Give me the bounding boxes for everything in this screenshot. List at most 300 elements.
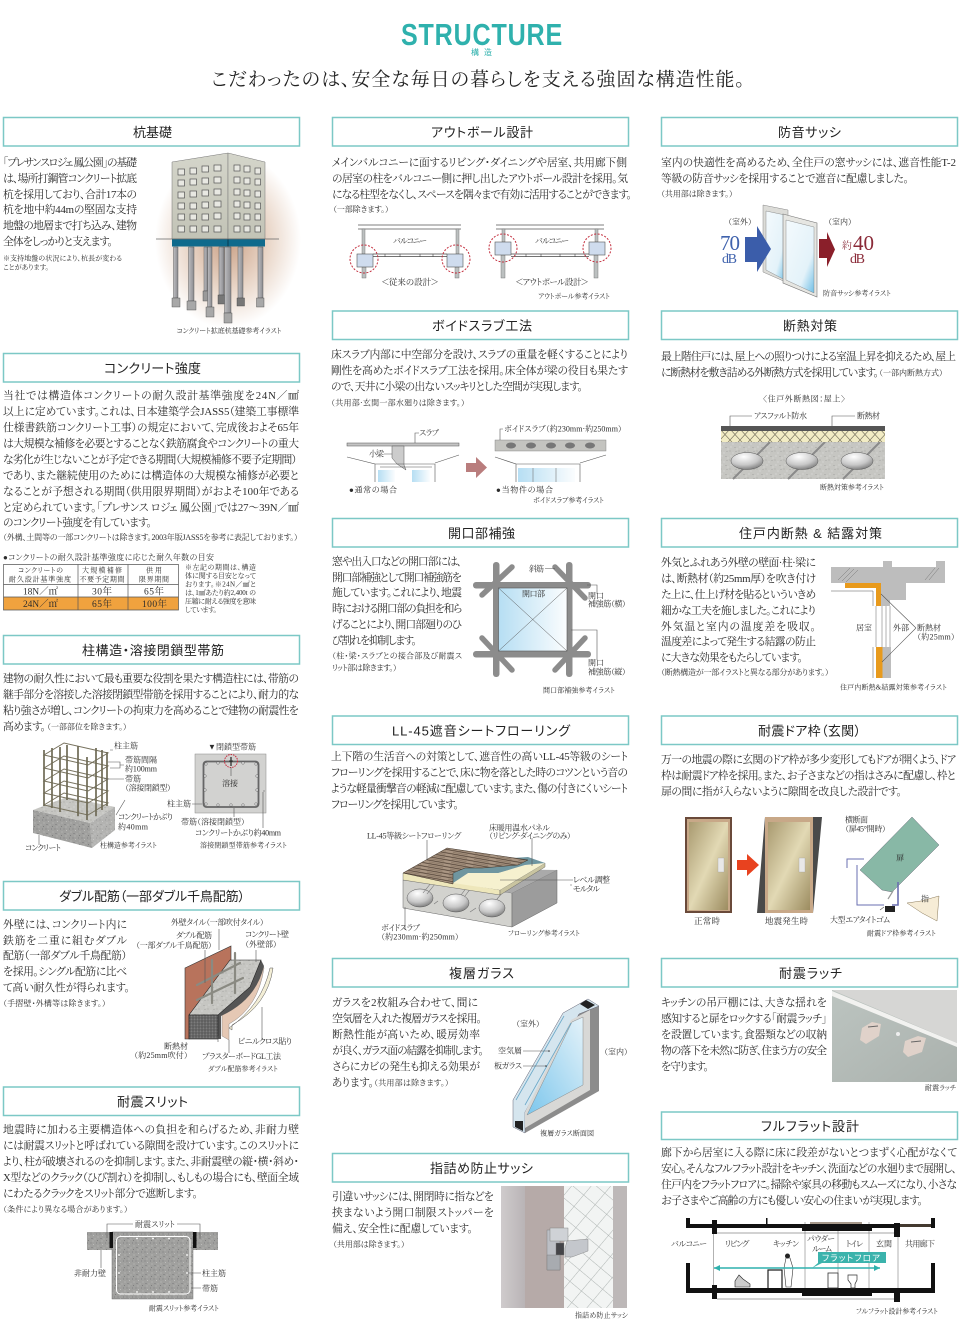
caption: 指詰め防止サッシ <box>575 1310 629 1320</box>
text block: に断熱材を敷き詰める外断熱方式を採用しています。 <box>661 365 879 379</box>
illustration: insulation section: 断熱材 <box>917 622 941 632</box>
illustration: flooring layers: LL-45等級シートフローリング <box>367 830 461 840</box>
illustration: roof insulation: 〈住戸外断熱図：屋上〉 <box>763 394 845 404</box>
illustration: seismic slit: 非耐力壁 <box>74 1268 106 1278</box>
heading <box>4 354 300 382</box>
table note: しています。 <box>185 606 217 614</box>
text block: メインバルコニーに面するリビング・ダイニングや居室、共用廊下側 <box>331 155 627 169</box>
text block: ※支持地盤の状況により、杭長が変わる <box>3 254 122 262</box>
panel: 住戸内断熱 & 結露対策 <box>661 518 958 692</box>
text block: 配筋（一部ダブル千鳥配筋） <box>3 948 127 962</box>
text block: 空気層を入れた複層ガラスを採用。 <box>332 1011 482 1025</box>
illustration: section <box>671 1218 935 1302</box>
text block <box>332 995 484 1089</box>
text block: 地盤の地層まで打ち込み、建物 <box>3 218 137 232</box>
text block: 安心。そんなフルフラット設計をキッチン、洗面などの水廻りまで展開し、 <box>661 1161 957 1175</box>
caption: 耐震スリット参考イラスト <box>149 1304 219 1312</box>
text block: （共用部·玄関一部水廻りは除きます。） <box>331 398 465 408</box>
text block: 室内の快適性を高めるため、全住戸の窓サッシには、遮音性能T-2 <box>661 155 956 169</box>
column labels: 柱主筋 <box>114 740 138 750</box>
text block: 仕様書鉄筋コンクリート工事）の規定において、完成後およそ65年 <box>3 420 299 434</box>
column labels: 帯筋間隔 <box>125 754 157 764</box>
illustration: flooring layers: 床暖用温水パネル <box>489 822 550 832</box>
caption: 開口部補強参考イラスト <box>543 686 615 694</box>
durability table: コンクリートの <box>18 566 63 574</box>
text block: 開口部補強として開口補強筋を <box>332 570 462 584</box>
caption: 柱構造参考イラスト <box>100 840 157 850</box>
panel: LL-45遮音シートフローリング <box>331 716 628 942</box>
diagram: void slab <box>495 424 622 494</box>
illustration: roof insulation: 断熱材 <box>857 410 880 420</box>
text block: を守ります。 <box>661 1060 709 1073</box>
wall labels: コンクリート壁 <box>245 929 289 939</box>
text block <box>331 155 632 214</box>
text block: な劣化が生じないことが予定できる期間（大規模補修不要予定期間） <box>3 452 297 466</box>
wall labels: ダブル配筋 <box>176 930 212 940</box>
durability table: 限界期間 <box>139 574 169 584</box>
text block: より、柱が破壊されるのを抑制します。また、非耐震壁の縦・横・斜め・ <box>3 1154 299 1168</box>
text block: ガラスを2枚組み合わせて、間に <box>332 995 478 1009</box>
column labels <box>25 740 173 852</box>
text block: 万一の地震の際に玄関のドア枠が多少変形してもドアが開くよう、ドア <box>661 752 956 766</box>
illustration: insulation section: 外部 <box>893 622 909 632</box>
durability table: 30年 <box>92 586 112 598</box>
heading <box>662 716 958 744</box>
flat floor arrow and flag <box>714 1252 886 1271</box>
illustration: welded hoop: 溶接 <box>222 778 238 788</box>
illustration: flooring layers <box>367 822 610 942</box>
diagram: out-pole design: ＜アウトポール設計＞ <box>516 277 588 287</box>
illustration: soundproof sash: （室外） <box>728 216 752 226</box>
text block: であり、また継続使用のためには構造体の大規模な補修が必要と <box>3 468 299 482</box>
room labels: トイレ <box>846 1240 864 1248</box>
column labels: 帯筋 <box>125 774 141 784</box>
text block: 「プレサンスロジェ 鳳公園」の基礎 <box>3 155 137 169</box>
illustration: building and piles <box>155 152 301 328</box>
column labels: （溶接閉鎖型） <box>125 782 171 792</box>
text block: （一部部位を除きます。） <box>47 722 127 732</box>
title <box>211 17 745 90</box>
illustration: door frame section <box>830 814 939 924</box>
wall labels: 断熱材 <box>164 1041 188 1051</box>
durability table <box>4 564 178 610</box>
illustration: double glazing: （室外） <box>516 1018 540 1028</box>
text block: 杭を地中約44mの堅固な支持 <box>3 202 137 216</box>
table caption: ●コンクリートの耐久設計基準強度に応じた耐久年数の目安 <box>3 552 214 562</box>
text block: （断熱構造が一部イラストと異なる部分があります。） <box>661 667 829 677</box>
illustration: soundproof sash: dB <box>722 252 737 267</box>
illustration: flooring layers: ボイドスラブ <box>381 924 420 932</box>
heading: 断熱対策 <box>783 319 837 334</box>
column labels: 約40mm <box>118 822 149 832</box>
illustration: welded hoop <box>167 742 287 850</box>
wall labels <box>134 917 292 1061</box>
illustration: double rebar wall <box>134 917 292 1073</box>
text block <box>3 1122 299 1214</box>
panel: ボイドスラブ工法 <box>331 311 629 504</box>
text block: 温度差によって発生する結露の防止 <box>661 634 816 648</box>
illustration: double glazing: 板ガラス <box>494 1060 522 1070</box>
table note: 体に関する目安となって <box>185 571 257 580</box>
durability table: 65年 <box>144 586 164 598</box>
room labels: キッチン <box>773 1240 800 1248</box>
text block: にわたるクラックをスリット部分で遮断します。 <box>3 1186 198 1200</box>
illustration: insulation section <box>831 561 955 678</box>
column labels: コンクリートかぶり <box>118 812 173 822</box>
illustration: double glazing: 空気層 <box>498 1046 522 1056</box>
text block <box>332 554 462 672</box>
text block: キッチンの吊戸棚には、大きな揺れを <box>661 995 827 1009</box>
text block <box>661 995 827 1073</box>
text block: になる柱型をなくし、スペースを隅々まで有効に活用することができます。 <box>332 187 632 201</box>
fixtures <box>735 1254 857 1288</box>
diagram: opening reinforcement: 斜筋 <box>529 564 544 574</box>
panel: 耐震スリット <box>3 1087 300 1312</box>
illustration: soundproof sash: 40 <box>853 231 874 255</box>
heading <box>332 311 628 340</box>
text block: 当社では構造体コンクリートの耐久設計基準強度を24N／㎟ <box>3 388 299 402</box>
heading: ダブル配筋（一部ダブル千鳥配筋） <box>59 889 245 904</box>
illustration: seismic slit: 柱主筋 <box>202 1268 226 1278</box>
caption: 溶接閉鎖型帯筋参考イラスト <box>200 840 287 850</box>
text block: 外気温と室内の温度差を吸収。 <box>661 619 816 633</box>
text block: （柱・梁・スラブとの接合部及び耐震ス <box>332 650 462 660</box>
text block <box>3 155 137 272</box>
illustration: soundproof sash: 70 <box>720 231 740 255</box>
durability table: 耐久設計基準強度 <box>9 574 71 584</box>
diagram: opening reinforcement <box>473 562 626 677</box>
heading <box>662 118 958 146</box>
diagram: conventional slab: 小梁 <box>369 448 385 458</box>
text block: のコンクリート強度を有しています。 <box>3 515 152 529</box>
diagram: out-pole design: バルコニー <box>535 236 569 246</box>
illustration: seismic slit: 耐震スリット <box>135 1219 175 1229</box>
text block <box>661 1145 957 1207</box>
illustration: door frame section: （扉45°開時） <box>845 824 886 834</box>
caption: 耐震ラッチ <box>925 1083 957 1092</box>
durability table: 65年 <box>92 598 112 610</box>
text block <box>661 752 956 798</box>
table note: 圧縮に耐える強度を意味 <box>185 596 256 606</box>
caption: 複層ガラス断面図 <box>540 1128 594 1138</box>
text block: 床スラブ内部に中空部分を設け、スラブの重量を軽くすることにより <box>331 347 628 361</box>
text block: （共用部は除きます。） <box>661 188 733 198</box>
room labels: リビング <box>725 1240 749 1248</box>
diagram: conventional design: バルコニー <box>393 236 427 246</box>
diagram: conventional slab: スラブ <box>419 428 439 438</box>
text block <box>3 671 299 733</box>
text block: 全体をしっかりと支えます。 <box>3 234 113 248</box>
text block: 鉄筋を二重に組むダブル <box>3 933 127 947</box>
text block: び割れを抑制します。 <box>332 633 417 647</box>
column labels: 約100mm <box>125 764 158 774</box>
heading <box>4 1087 300 1116</box>
text block: （共用部は除きます。） <box>333 1239 405 1249</box>
column labels: コンクリート <box>25 844 61 852</box>
table note: おります。※24N／㎟と <box>185 580 256 588</box>
text block: 高めます。 <box>3 719 46 733</box>
text block: ような軽量衝撃音の軽減に配慮しています。また、傷の付きにくいシート <box>331 781 628 795</box>
text block: 外壁には、コンクリート内に <box>3 917 127 931</box>
text block: フローリングを採用することで、床に物を落とした時のコツンという音の <box>331 765 628 779</box>
wall labels: （約25mm吹付） <box>134 1050 188 1060</box>
text block: 廊下から居室に入る際に床に段差がないとつまずく心配がなくて <box>661 1145 957 1159</box>
heading: 防音サッシ <box>778 125 841 140</box>
caption: 耐震ドア枠参考イラスト <box>867 928 936 938</box>
text block: ことがあります。 <box>3 264 49 272</box>
wall labels: 外壁タイル（一部吹付タイル） <box>171 917 264 927</box>
diagram: out-pole design <box>489 225 611 287</box>
table note: は、1㎟あたり約2,400t の <box>185 588 256 597</box>
text block <box>332 1189 494 1249</box>
text block: は、場所打鋼管コンクリート拡底 <box>3 171 137 185</box>
text block: 扉の間に指が入らないように隙間を改良した設計です。 <box>661 784 902 798</box>
text block: に大きな効果をもたらしています。 <box>661 650 803 664</box>
text block: （一部除きます。） <box>333 204 389 214</box>
room labels: 共用廊下 <box>905 1238 935 1248</box>
text block: 時における開口部の負担を和ら <box>332 601 462 615</box>
flat floor arrow and flag: フラットフロア <box>822 1253 880 1263</box>
text block: 杭を採用しており、合計17本の <box>3 187 137 201</box>
caption: ダブル配筋参考イラスト <box>208 1064 278 1073</box>
diagram: conventional slab: ●通常の場合 <box>349 484 397 494</box>
illustration: door frame section: 大型エアタイトゴム <box>830 914 890 924</box>
caption: コンクリート拡底杭基礎参考イラスト <box>176 326 282 335</box>
diagram: void slab: ボイドスラブ（約230mm·約250mm） <box>504 424 622 434</box>
durability table: 18N／㎡ <box>23 586 58 598</box>
illustration: double glazing <box>494 999 628 1133</box>
text block: （外構、土間等の一部コンクリートは除きます。2003年版JASS5を参考に表記しております。） <box>3 532 298 542</box>
text block: 物の落下を未然に防ぎ、住まう方の安全 <box>661 1043 827 1057</box>
illustration: soundproof sash: 約 <box>842 239 852 252</box>
arrow <box>466 457 487 478</box>
text block <box>3 917 130 1008</box>
illustration: roof insulation: アスファルト防水 <box>754 410 807 420</box>
panel: 指詰め防止サッシ <box>332 1154 629 1320</box>
panel: 開口部補強 <box>332 518 628 694</box>
text block: 感知すると扉をロックする「耐震ラッチ」 <box>661 1011 827 1025</box>
text block: た上に、仕上げ材を貼るといういきめ <box>661 587 816 601</box>
room labels: 玄関 <box>876 1238 892 1248</box>
text block: が良く、ガラス面の結露を抑制します。 <box>332 1043 484 1057</box>
table note <box>185 562 257 614</box>
room labels: ルーム <box>812 1244 832 1254</box>
diagram: opening reinforcement: 開口 <box>588 658 604 668</box>
wall labels: ビニルクロス貼り <box>238 1036 292 1046</box>
illustration: seismic slit: 帯筋 <box>202 1283 218 1293</box>
text block: リット部は除きます。） <box>332 662 397 672</box>
heading: 杭基礎 <box>133 125 172 140</box>
illustration: roof insulation <box>721 394 885 479</box>
panel: 柱構造・溶接閉鎖型帯筋 <box>3 636 300 852</box>
text block: フローリングを採用しています。 <box>331 797 459 811</box>
text block: 住戸内をフラットフロアに。掃除や家具の移動もスムーズになり、小さな <box>661 1177 957 1191</box>
illustration: door during earthquake <box>757 817 822 926</box>
illustration: flooring layers: モルタル <box>573 884 600 894</box>
caption: アウトポール参考イラスト <box>538 292 610 300</box>
text block: お子さまやご高齢の方にも優しい安心の住まいが実現します。 <box>661 1193 923 1207</box>
text block: 窓や出入口などの開口部には、 <box>332 554 462 568</box>
photo: stopper <box>501 1186 627 1308</box>
durability table: 大規模補修 <box>82 566 122 574</box>
caption: 住戸内断熱&結露対策参考イラスト <box>840 682 947 692</box>
heading: 耐震ラッチ <box>779 966 842 981</box>
illustration: flooring layers: （リビング·ダイニングのみ） <box>489 832 571 840</box>
text block: を採用。シングル配筋に比べ <box>3 964 127 978</box>
wall labels: プラスターボードGL工法 <box>202 1051 282 1061</box>
heading: コンクリート強度 <box>104 361 201 376</box>
diagram: opening reinforcement: 開口部 <box>522 588 545 598</box>
illustration: welded hoop: 柱主筋 <box>167 798 191 808</box>
diagram: opening reinforcement: 補強筋（横） <box>588 598 626 608</box>
heading <box>662 958 958 987</box>
photo: latch <box>832 990 957 1082</box>
text block: 以上に定めています。これは、日本建築学会JASS5（建築工事標準 <box>3 404 299 418</box>
text block: 剛性を高めたボイドスラブ工法を採用。床全体が梁の役目も果たす <box>331 363 629 377</box>
heading: ボイドスラブ工法 <box>432 319 532 334</box>
text block <box>331 347 629 408</box>
text block: 上下階の生活音への対策として、遮音性の高いLL-45等級のシート <box>331 749 628 763</box>
durability table: 24N／㎡ <box>23 599 58 610</box>
text block: 備え、安全性に配慮しています。 <box>332 1221 473 1235</box>
text block: は、断熱材（約25mm厚）を吹き付け <box>661 571 816 585</box>
room labels <box>671 1234 935 1254</box>
text block: 断熱性能が高いため、暖房効率 <box>332 1027 480 1041</box>
heading <box>332 518 628 547</box>
durability table: 100年 <box>142 598 167 610</box>
text block: て高い耐久性が得られます。 <box>3 980 130 994</box>
diagram: conventional slab <box>347 428 459 494</box>
caption: フルフラット設計参考イラスト <box>856 1306 938 1316</box>
diagram: void slab: ●当物件の場合 <box>496 484 553 494</box>
text block <box>661 555 829 677</box>
heading: 住戸内断熱 & 結露対策 <box>739 526 882 541</box>
illustration: welded hoop: 帯筋（溶接閉鎖型） <box>181 816 245 826</box>
text block <box>331 749 628 811</box>
illustration: column rebar <box>25 740 173 852</box>
text block: X型などのクラック（ひび割れ）を抑制し、もしもの場合にも、壁面全域 <box>3 1170 299 1184</box>
text block: 建物の耐久性において最も重要な役割を果たす構造柱には、帯筋の <box>3 671 299 685</box>
illustration: door during earthquake: 地震発生時 <box>765 916 808 926</box>
heading <box>4 118 300 146</box>
heading <box>4 882 300 910</box>
illustration: door frame section: 横断面 <box>845 814 868 824</box>
panel: コンクリート強度 <box>3 354 299 614</box>
caption: 断熱対策参考イラスト <box>820 482 884 492</box>
table note: ※左記の期間は、構造 <box>185 562 256 572</box>
heading: LL-45遮音シートフローリング <box>392 724 571 739</box>
tagline: こだわったのは、安全な毎日の暮らしを支える強固な構造性能。 <box>211 68 745 90</box>
text block <box>661 155 956 198</box>
caption: ボイドスラブ参考イラスト <box>533 496 604 504</box>
text block: 外気とふれあう外壁の壁面·柱·梁に <box>661 555 816 569</box>
illustration: seismic slit <box>74 1219 226 1299</box>
text block: （共用部は除きます。） <box>374 1078 449 1088</box>
text block: 枠は耐震ドア枠を採用。また、お子さまなどの指はさみに配慮し、枠と <box>661 768 956 782</box>
text block: 等級の防音サッシを採用することで遮音に配慮しました。 <box>661 171 909 185</box>
illustration: door frame section: 扉 <box>896 854 904 862</box>
caption: 防音サッシ参考イラスト <box>823 288 891 298</box>
illustration: double glazing: （室内） <box>604 1046 628 1056</box>
illustration: soundproof sash: dB <box>850 252 865 267</box>
panel: 耐震ラッチ <box>661 958 958 1092</box>
text block: 地震時に加わる主要構造体への負担を和らげるため、非耐力壁 <box>3 1122 299 1136</box>
heading: 指詰め防止サッシ <box>430 1161 533 1176</box>
heading: アウトボール設計 <box>431 125 533 140</box>
heading <box>662 1112 958 1140</box>
text block <box>661 349 956 379</box>
illustration: door frame section: 指 <box>921 894 929 904</box>
panel: フルフラット設計 <box>661 1112 958 1316</box>
title: 構造: 構造 <box>471 47 492 57</box>
text block: （条件により異なる場合があります。） <box>3 1204 128 1214</box>
text block: 施しています。これにより、地震 <box>332 585 462 599</box>
text block: 最上階住戸には、屋上への照りつけによる室温上昇を抑えるため、屋上 <box>661 349 956 363</box>
text block: あります。 <box>332 1076 374 1089</box>
text block: 粘り強さが増し、コンクリートの拘束力を高めることで建物の耐震性を <box>3 703 299 717</box>
illustration: normal door <box>685 817 732 926</box>
text block: 細かな工夫を施しました。これにより <box>661 603 816 617</box>
heading <box>332 958 628 987</box>
heading <box>4 636 300 664</box>
heading <box>662 311 958 340</box>
text block: 引違いサッシには、開閉時に指などを <box>332 1189 494 1203</box>
heading: 開口部補強 <box>448 526 515 541</box>
panel: ダブル配筋 <box>3 882 300 1073</box>
heading: 耐震スリット <box>117 1095 188 1110</box>
text block: ので、天井に小梁の出ないスッキリとした空間が実現します。 <box>331 379 583 393</box>
text block <box>3 388 299 542</box>
panel: 断熱対策 <box>661 311 958 492</box>
title: STRUCTURE: STRUCTURE <box>401 17 563 52</box>
heading: 柱構造・溶接閉鎖型帯筋 <box>82 643 224 658</box>
illustration: welded hoop: ▼閉鎖型帯筋 <box>208 742 256 752</box>
wall labels: （外壁部） <box>245 939 277 949</box>
panel: 耐震ドア枠 <box>661 716 958 938</box>
panel: 複層ガラス <box>332 958 628 1138</box>
illustration: insulation section: （約25mm） <box>917 632 955 642</box>
illustration: welded hoop: コンクリートかぶり約40mm <box>195 828 282 838</box>
text block: なることが予想される期間（供用限界期間）がおよそ100年である <box>3 484 299 498</box>
text block: （一部内断熱方式） <box>879 368 943 378</box>
heading: 耐震ドア枠（玄関） <box>758 724 861 739</box>
heading <box>662 518 958 547</box>
illustration: insulation section: 居室 <box>856 622 872 632</box>
illustration: flooring layers: レベル調整 <box>573 874 610 884</box>
heading: 複層ガラス <box>449 966 514 981</box>
text block: には耐震スリットと呼ばれている隙間を設けています。このスリットに <box>3 1138 299 1152</box>
text block: は大規模な補修を必要とすることなく鉄筋腐食やコンクリートの重大 <box>3 436 299 450</box>
text block: さらにカビの発生も抑える効果が <box>332 1059 480 1073</box>
caption: フローリング参考イラスト <box>508 928 580 938</box>
text block: の居室の柱をバルコニー側に押し出したアウトポール設計を採用。気 <box>332 171 628 185</box>
illustration: flooring layers: （約230mm·約250mm） <box>381 932 459 942</box>
durability table: 不要予定期間 <box>80 574 124 584</box>
diagram: conventional design: ＜従来の設計＞ <box>382 277 438 287</box>
diagram: opening reinforcement: 開口 <box>588 592 604 600</box>
panel: 防音サッシ <box>661 118 958 298</box>
diagram: opening reinforcement: 補強筋（縦） <box>588 666 626 676</box>
durability table: 供用 <box>146 566 162 574</box>
room labels: バルコニー <box>671 1240 707 1248</box>
text block: 挟まないよう開口制限ストッパーを <box>332 1205 494 1219</box>
text block: （手摺壁・外構等は除きます。） <box>3 998 106 1008</box>
heading <box>332 1154 628 1182</box>
heading <box>332 118 628 146</box>
diagram: conventional design <box>350 225 470 287</box>
wall labels: （一部ダブル千鳥配筋） <box>136 940 212 950</box>
text block: を設置しています。食器類などの収納 <box>661 1027 827 1041</box>
